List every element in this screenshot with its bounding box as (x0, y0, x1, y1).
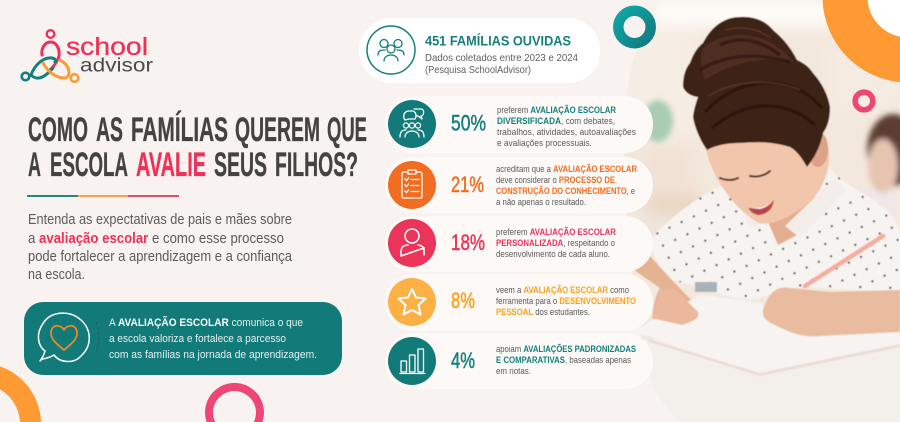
logo mark (22, 30, 78, 82)
right arm and hand (763, 287, 900, 336)
callout text: a escola valoriza e fortalece a parcesso (109, 333, 286, 345)
percentage: 21% (451, 172, 484, 197)
decorative ring: pink bottom (205, 383, 264, 422)
description: DIVERSIFICADA, com debates, (497, 116, 615, 126)
title: AS (96, 111, 123, 149)
percentage: 18% (451, 230, 485, 255)
panel: 50% (385, 96, 653, 153)
decorative ring: orange top right (823, 0, 900, 82)
percentage: 50% (451, 110, 486, 136)
panel: 21% (385, 157, 653, 213)
title: SEUS (214, 146, 267, 184)
callout text (109, 316, 317, 361)
subtext: (Pesquisa SchoolAdvisor) (425, 65, 531, 76)
percentage: 8% (451, 288, 475, 313)
photo: girl writing at a desk (624, 16, 900, 376)
intro paragraph (28, 212, 292, 283)
description: PERSONALIZADA, respeitando o (496, 238, 615, 248)
title underline (27, 195, 179, 197)
description: e avaliações processuais. (497, 138, 592, 148)
neck (768, 196, 815, 246)
description: preferem AVALIAÇÃO ESCOLAR (497, 105, 616, 115)
title: COMO (28, 111, 88, 149)
description: desenvolvimento de cada aluno. (496, 249, 610, 259)
face (706, 138, 829, 224)
decorative ring: pink right (855, 92, 873, 110)
intro paragraph: pode fortalecer a aprendizagem e a confiança (28, 249, 292, 265)
heading: 451 FAMÍLIAS OUVIDAS (425, 32, 571, 48)
title: FAMÍLIAS (131, 111, 228, 149)
title: QUE (327, 111, 367, 149)
title: AVALIE (136, 146, 206, 184)
callout text: A AVALIAÇÃO ESCOLAR comunica o que (109, 316, 303, 329)
panel: 18% (385, 216, 653, 272)
description (496, 285, 636, 317)
panel: 4% (385, 333, 653, 389)
intro paragraph: Entenda as expectativas de pais e mães sobre (28, 212, 292, 228)
desk (620, 340, 900, 422)
percentage: 4% (451, 348, 475, 373)
description: em notas. (496, 366, 531, 376)
left arm and hand (634, 256, 692, 320)
icon: person (388, 219, 436, 267)
panel: 451 famílias ouvidas (359, 18, 600, 83)
description: veem a AVALIAÇÃO ESCOLAR como (496, 285, 629, 295)
description: apoiam AVALIAÇÕES PADRONIZADAS (496, 344, 636, 354)
title: FILHOS? (275, 146, 358, 184)
icon: star (388, 278, 436, 326)
pencil (805, 236, 883, 286)
decorative ring: teal (618, 11, 651, 43)
description (496, 344, 636, 376)
icon: group of people (367, 26, 415, 74)
eyes and smile (720, 171, 770, 180)
subtext (425, 53, 578, 76)
description (496, 164, 637, 207)
title (28, 111, 367, 184)
icon: speech bubble with heart (38, 313, 99, 362)
callout: teal box (24, 302, 342, 375)
description: PESSOAL dos estudantes. (496, 307, 590, 317)
description: a não apenas o resultado. (496, 197, 586, 207)
background child (860, 110, 900, 210)
icon: conversation group (388, 100, 436, 148)
title: ESCOLA (50, 146, 128, 184)
icon: clipboard checklist (388, 161, 436, 209)
collar (784, 188, 846, 236)
title: A (28, 146, 41, 184)
callout text: com as famílias na jornada de aprendizagem. (109, 349, 317, 361)
description: ferramenta para o DESENVOLVIMENTO (496, 296, 636, 306)
title: QUEREM (235, 111, 320, 149)
icon: bar chart (388, 337, 436, 385)
description: preferem AVALIAÇÃO ESCOLAR (496, 227, 616, 237)
notebook (640, 295, 900, 340)
logo: SchoolAdvisor (22, 30, 154, 82)
decorative ring: orange bottom left (0, 366, 41, 422)
description (496, 227, 616, 259)
description (497, 105, 636, 148)
hair (683, 17, 830, 167)
shirt (652, 166, 900, 300)
description: E COMPARATIVAS, baseadas apenas (496, 355, 631, 365)
subtext: Dados coletados entre 2023 e 2024 (425, 53, 578, 64)
intro paragraph: na escola. (28, 267, 85, 283)
description: deve considerar o PROCESSO DE (496, 175, 615, 185)
description: CONSTRUÇÃO DO CONHECIMENTO, e (496, 186, 635, 196)
logo wordmark: school (66, 33, 148, 61)
description: trabalhos, atividades, autoavaliações (497, 127, 636, 137)
panel: 8% (385, 274, 653, 331)
description: acreditam que a AVALIAÇÃO ESCOLAR (496, 164, 637, 174)
intro paragraph: a avaliação escolar e como esse processo (28, 231, 284, 247)
logo: SchoolAdvisor: advisor (80, 56, 154, 76)
